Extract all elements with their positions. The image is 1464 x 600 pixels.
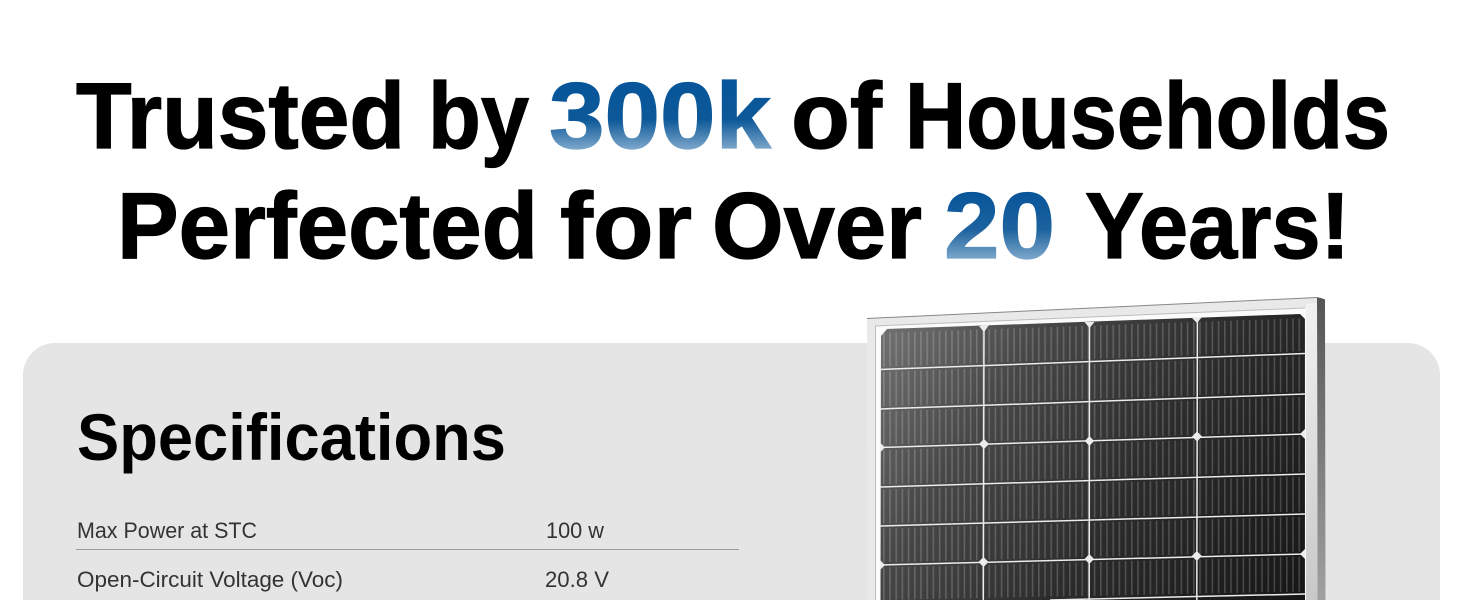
spec row: max power xyxy=(76,518,739,550)
panel: grey specifications background xyxy=(23,343,1440,600)
title: line 1: 300k xyxy=(549,63,772,168)
title: line 1: by xyxy=(428,63,529,168)
busbar lines xyxy=(880,318,1305,600)
cell grid stripes xyxy=(880,318,1305,600)
aluminium frame xyxy=(867,297,1318,600)
spec row: open-circuit voltage: 20.8 V xyxy=(545,567,609,592)
title: line 1 xyxy=(76,63,1390,168)
title: line 2: 20 xyxy=(944,173,1055,278)
title: line 2: Years! xyxy=(1085,173,1350,278)
title: line 2 xyxy=(117,173,1350,278)
title: line 1: Trusted xyxy=(76,63,405,168)
panel side edge xyxy=(1316,297,1326,600)
solar panel image xyxy=(867,297,1326,600)
spec row: open-circuit voltage xyxy=(77,567,609,592)
spec row: open-circuit voltage: Open-Circuit Voltage (Voc) xyxy=(77,567,343,592)
title: line 2: for xyxy=(560,173,692,278)
spec row: max power: Max Power at STC xyxy=(77,518,257,543)
title: line 1: of xyxy=(791,63,883,168)
title: line 1: Households xyxy=(905,63,1390,168)
photovoltaic cell area xyxy=(880,314,1305,600)
title: line 2: Perfected xyxy=(117,173,538,278)
spec row: max power: 100 w xyxy=(546,518,604,543)
title: line 2: Over xyxy=(712,173,922,278)
heading: Specifications: Specifications xyxy=(77,400,506,474)
junction diamonds xyxy=(880,317,1305,570)
